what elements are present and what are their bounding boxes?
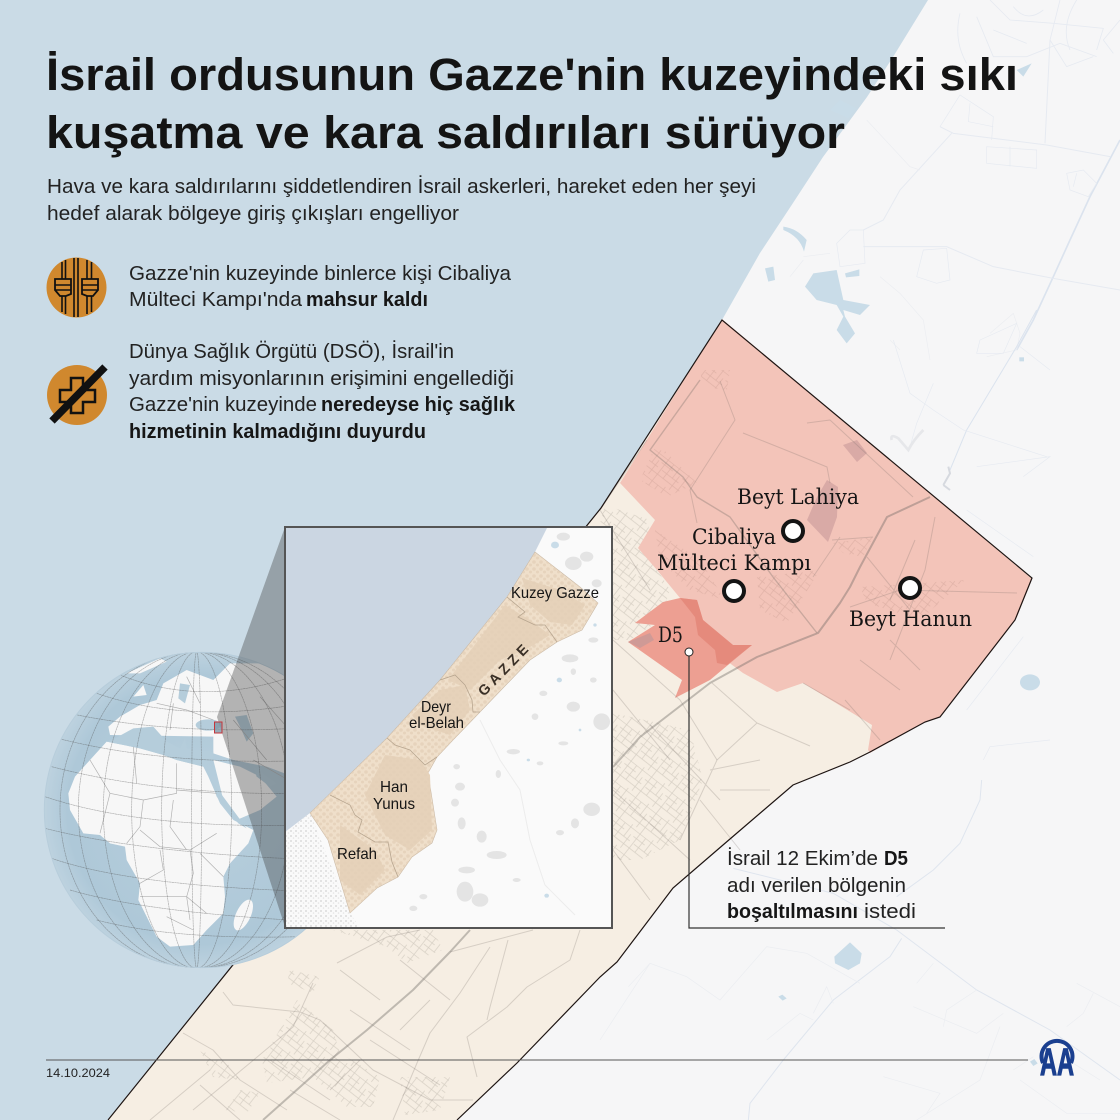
callout text: İsrail 12 Ekim’de xyxy=(727,847,878,870)
D5 evacuation zone xyxy=(628,598,752,698)
urban street clusters xyxy=(200,505,703,1115)
marker: Beyt Lahiya xyxy=(783,521,803,541)
governorate boundaries xyxy=(330,597,557,877)
land masses xyxy=(68,658,284,947)
Sinai speckle xyxy=(286,813,360,928)
label: Deyr el-Belah xyxy=(409,699,464,732)
label: Refah: Refah xyxy=(337,846,377,863)
D5 overlap band xyxy=(680,598,752,665)
location marker on globe xyxy=(214,722,222,733)
label: Han Yunus: Han xyxy=(380,779,408,796)
date: 14.10.2024 xyxy=(46,1066,110,1080)
logo: AA xyxy=(1040,1041,1074,1084)
northern land: roads, towns and lakes xyxy=(765,0,1120,360)
icon: hands on prison bars xyxy=(46,258,106,318)
inner seas xyxy=(107,683,277,828)
logo: AA: AA xyxy=(1040,1042,1074,1084)
label: Deyr el-Belah: Deyr xyxy=(421,699,452,716)
callout text xyxy=(727,847,916,923)
text: trapped in Jabalia xyxy=(129,262,512,311)
graticule xyxy=(45,652,295,968)
text: trapped in Jabalia: Mülteci Kampı'nda xyxy=(129,288,303,311)
Gaza strip in inset xyxy=(310,552,598,913)
subtitle: hedef alarak bölgeye giriş çıkışları engelliyor xyxy=(47,202,459,225)
red zone street clusters xyxy=(640,370,965,623)
text: WHO statement: Gazze'nin kuzeyinde xyxy=(129,393,317,416)
Gaza strip xyxy=(108,320,1032,1120)
strip outline xyxy=(108,320,1032,1120)
title: kuşatma ve kara saldırıları sürüyor xyxy=(46,107,845,158)
globe xyxy=(44,652,306,968)
inset urban areas xyxy=(340,578,585,895)
inset faint road xyxy=(480,720,575,915)
subtitle xyxy=(47,175,756,225)
text: WHO statement: yardım misyonlarının erişimini engellediği xyxy=(129,367,514,390)
label: Han Yunus xyxy=(373,779,415,813)
ocean xyxy=(45,653,304,967)
north Gaza red zone xyxy=(620,319,1032,753)
country borders xyxy=(90,677,300,930)
callout text: boşaltılmasını xyxy=(727,900,858,923)
callout leader line xyxy=(685,648,945,928)
label: D5: D5 xyxy=(658,623,683,647)
label: Gazze: GAZZE xyxy=(475,639,535,700)
text: WHO statement: Dünya Sağlık Örgütü (DSÖ), İsrail'in xyxy=(129,340,454,363)
text: WHO statement xyxy=(129,340,516,443)
callout text: D5 xyxy=(884,847,908,870)
eastern land: roads and ponds xyxy=(891,310,1050,760)
callout text: istedi xyxy=(864,900,916,923)
inset frame xyxy=(285,527,612,928)
dark patch inside D5 xyxy=(628,633,654,648)
text: WHO statement: neredeyse hiç sağlık xyxy=(321,393,516,416)
inset grey settlements xyxy=(409,533,610,911)
title xyxy=(46,49,1018,158)
subtitle: Hava ve kara saldırılarını şiddetlendiren İsrail askerleri, hareket eden her şeyi xyxy=(47,175,756,198)
main map roads and streets xyxy=(150,380,1017,1120)
label: Cibaliya Mülteci Kampı xyxy=(657,525,811,575)
label: Beyt Hanun: Beyt Hanun xyxy=(849,607,972,631)
text: trapped in Jabalia: Gazze'nin kuzeyinde binlerce kişi Cibaliya xyxy=(129,262,512,285)
marker: Cibaliya xyxy=(724,581,744,601)
funnel from globe to inset xyxy=(217,527,285,927)
Beit Lahia dark built-up area xyxy=(807,440,867,542)
label: Deyr el-Belah: el-Belah xyxy=(409,715,464,732)
label: Cibaliya Mülteci Kampı: Mülteci Kampı xyxy=(657,551,811,575)
label: Han Yunus: Yunus xyxy=(373,796,415,813)
inset map of Gaza xyxy=(285,527,612,928)
icon: crossed-out medical cross xyxy=(47,365,107,425)
north lakes xyxy=(765,63,1032,343)
label: Beyt Lahiya: Beyt Lahiya xyxy=(737,485,859,509)
text: trapped in Jabalia: mahsur kaldı xyxy=(306,288,428,311)
marker: Beyt Hanun xyxy=(900,578,920,598)
title: İsrail ordusunun Gazze'nin kuzeyindeki sıkı xyxy=(46,49,1018,100)
globe rim xyxy=(44,652,360,968)
label: Kuzey Gazze: Kuzey Gazze xyxy=(511,585,599,602)
label: Cibaliya Mülteci Kampı: Cibaliya xyxy=(692,525,776,549)
text: WHO statement: hizmetinin kalmadığını duyurdu xyxy=(129,420,426,443)
footer line xyxy=(46,1059,1028,1061)
inset sea xyxy=(285,528,547,832)
callout text: adı verilen bölgenin xyxy=(727,874,906,897)
